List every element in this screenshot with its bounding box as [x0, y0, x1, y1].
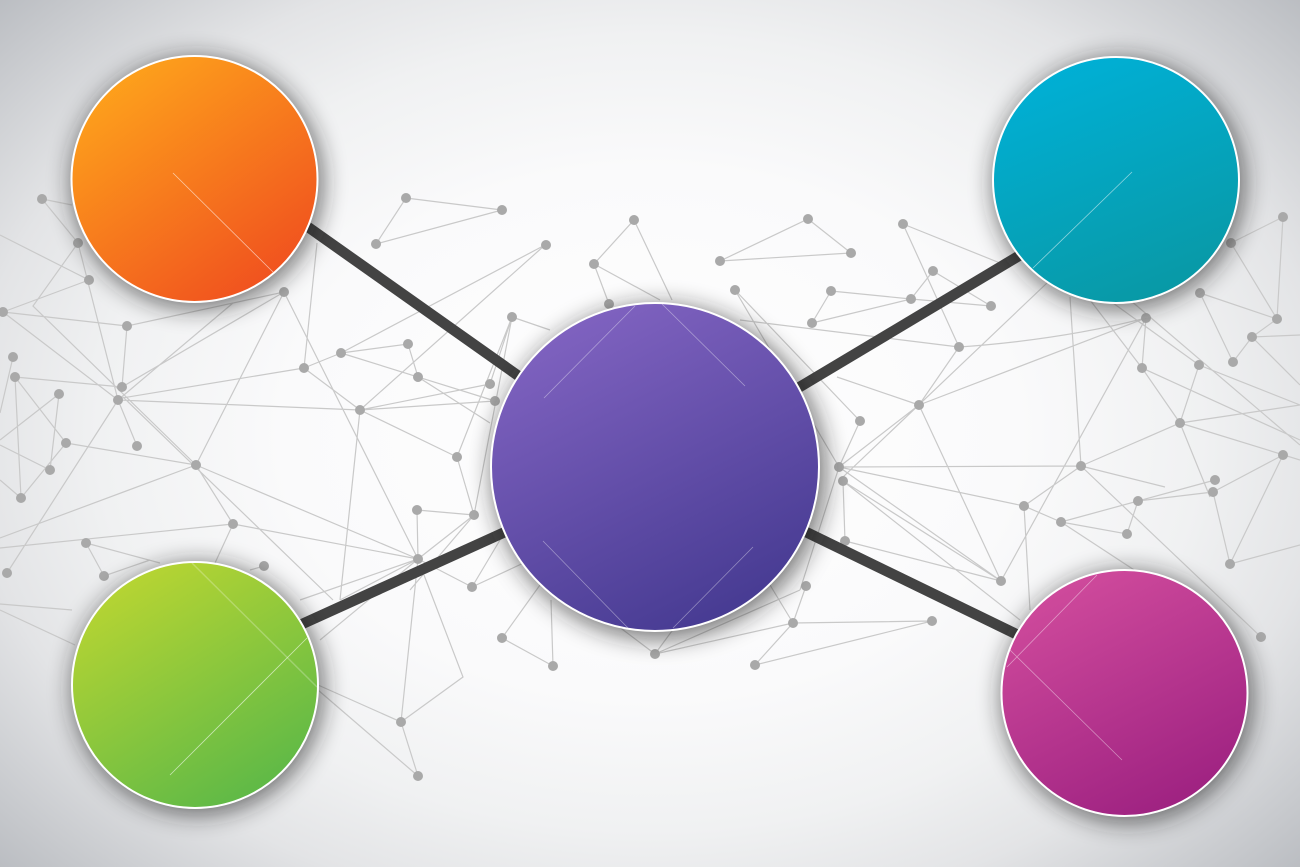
network mesh nodes — [0, 193, 1288, 781]
connector: centre to magenta circle — [806, 532, 1018, 635]
connector: centre to teal circle — [798, 254, 1022, 388]
purple centre circle — [491, 303, 826, 639]
teal circle — [993, 57, 1245, 310]
orange circle — [71, 56, 323, 309]
green circle — [72, 562, 324, 815]
magenta circle — [1002, 570, 1254, 823]
network mesh lines — [0, 198, 1300, 776]
connector: centre to orange circle — [308, 227, 520, 377]
connector: centre to green circle — [300, 532, 505, 625]
